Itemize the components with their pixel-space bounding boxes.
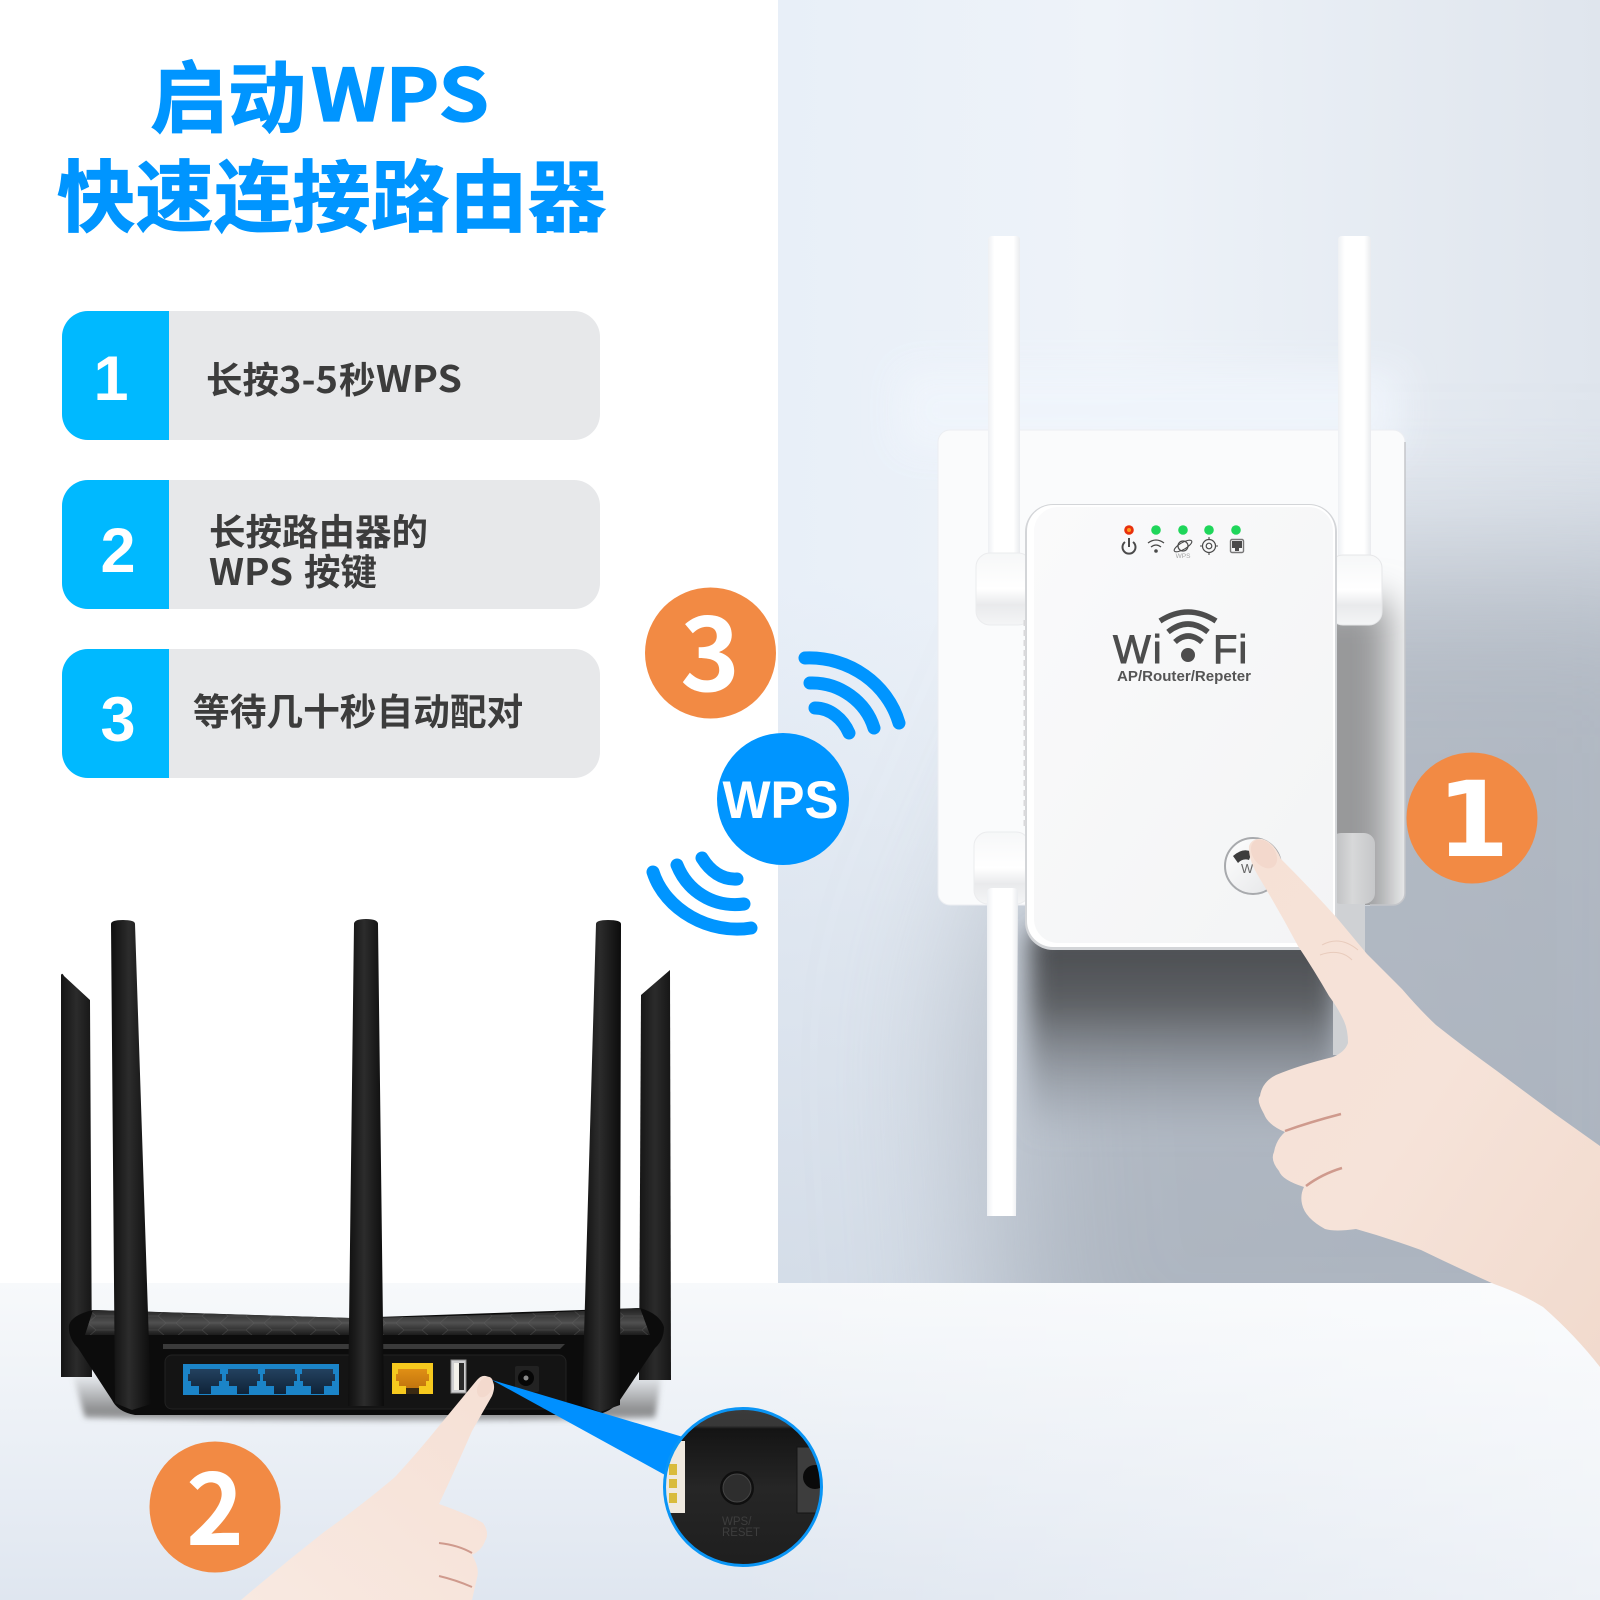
step 3 bar: 3 — [100, 685, 136, 755]
step 1 bar: WPS — [376, 350, 462, 403]
router body — [69, 1308, 664, 1415]
step 1 bar: 1 — [93, 344, 129, 414]
panel: floor — [0, 1283, 1600, 1600]
step 1 bar: 长按 — [206, 351, 279, 404]
Wi-Fi logo — [1113, 612, 1251, 685]
port panel — [165, 1355, 566, 1409]
Wi-Fi logo: Fi — [1213, 628, 1248, 672]
Wi-Fi logo: Wi — [1113, 628, 1164, 672]
right upper antenna — [1338, 236, 1371, 570]
reset label: RESET — [722, 1527, 760, 1539]
title: 启动 — [150, 37, 306, 149]
left upper antenna — [988, 236, 1020, 570]
orange badge 2: 2 — [186, 1432, 244, 1574]
title: WPS — [311, 37, 489, 142]
USB port — [451, 1360, 466, 1393]
centre antenna — [348, 919, 384, 1406]
Wi-Fi logo: AP/Router/Repeter — [1117, 668, 1251, 685]
left lower antenna — [987, 888, 1018, 1216]
step 2 bar — [62, 480, 600, 609]
step 3 bar: 等待几十秒自动配对 — [193, 682, 523, 736]
inner right antenna — [582, 920, 621, 1412]
WPS button — [1225, 838, 1281, 894]
right upper hinge — [1330, 555, 1382, 625]
status LEDs — [1124, 525, 1241, 535]
orange badge 2 — [150, 1432, 280, 1574]
signal arcs: lower left — [653, 858, 751, 929]
far left antenna — [61, 974, 92, 1377]
right lower antenna — [1333, 900, 1365, 1055]
signal arcs: upper right — [805, 658, 899, 733]
repeater on wall — [938, 236, 1405, 1216]
step 2 bar: 按键 — [304, 543, 377, 596]
pointer wedge to zoom circle — [492, 1380, 683, 1475]
reset label: WPS/ — [722, 1516, 752, 1528]
zoom circle: WPS button detail — [664, 1408, 827, 1568]
status icons — [1123, 537, 1244, 555]
inner left antenna — [111, 920, 151, 1410]
WPS circle: WPS — [722, 771, 838, 830]
hand pressing router — [241, 1374, 496, 1600]
panel: wall background — [778, 0, 1600, 1283]
step 1 bar: 3-5 — [279, 351, 338, 404]
device body — [1025, 504, 1337, 950]
step 1 bar — [62, 311, 600, 440]
WAN port — [392, 1363, 433, 1394]
wall plate — [938, 430, 1405, 960]
orange badge 1: 1 — [1437, 759, 1509, 881]
step 2 bar: WPS — [209, 543, 293, 596]
WPS button: W — [1241, 861, 1254, 876]
white port strip — [664, 1441, 685, 1513]
left lower hinge — [974, 832, 1030, 904]
orange badge 1 — [1406, 752, 1538, 884]
DC jack — [515, 1366, 539, 1392]
step 1 bar: 秒 — [339, 351, 376, 404]
LAN ports — [183, 1364, 339, 1395]
hand pressing repeater — [1245, 835, 1600, 1367]
rear strip — [163, 1344, 565, 1349]
step 3 bar — [62, 649, 600, 778]
step 2 bar: 2 — [100, 516, 136, 586]
router shadow — [72, 1372, 662, 1421]
reset button — [720, 1471, 754, 1505]
right lower hinge — [1330, 833, 1375, 904]
step 2 bar: 长按路由器的 — [209, 503, 428, 556]
left upper hinge — [976, 553, 1032, 625]
orange badge 3: 3 — [680, 575, 740, 721]
hexagon top surface — [85, 1308, 650, 1335]
DC socket box — [796, 1448, 820, 1514]
title — [57, 37, 606, 248]
router — [61, 919, 671, 1421]
WPS circle — [717, 733, 849, 865]
WPS icon label: WPS — [1176, 553, 1191, 560]
far right antenna — [639, 970, 671, 1380]
reset label — [722, 1516, 760, 1536]
title: 快速连接路由器 — [57, 136, 606, 248]
orange badge 3 — [645, 575, 776, 721]
